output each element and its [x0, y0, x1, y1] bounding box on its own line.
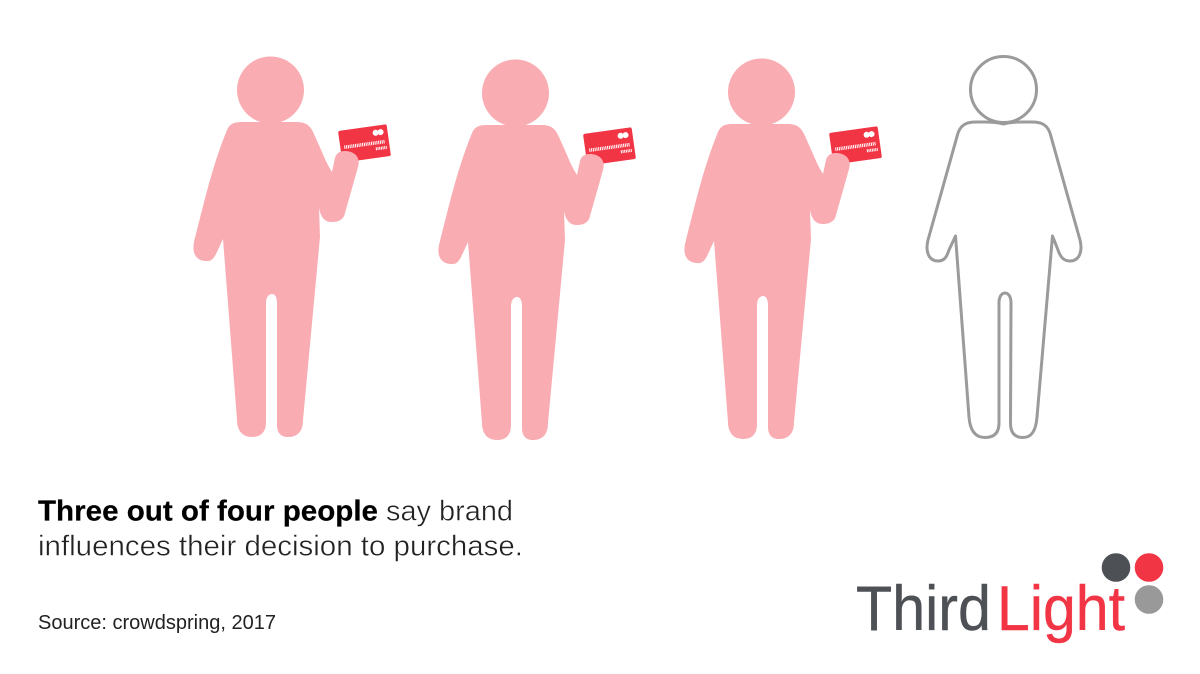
icon: person body — [193, 122, 359, 437]
person 2 holding card — [438, 60, 636, 440]
person 1 holding card — [193, 56, 391, 437]
logo dots — [1102, 553, 1163, 614]
icon: credit card — [338, 124, 391, 163]
icon: person body — [684, 124, 850, 439]
icon: outline head — [970, 56, 1036, 122]
icon: person head — [728, 58, 795, 126]
headline text: Three out of four people say brand — [38, 496, 513, 528]
logo wordmark: Third — [856, 574, 991, 644]
icon: outline body — [927, 122, 1081, 438]
logo: ThirdLight — [856, 553, 1163, 644]
icon: credit card — [583, 127, 636, 166]
source: Source: crowdspring, 2017 — [38, 612, 276, 634]
person 3 holding card — [684, 58, 882, 439]
icon: person body — [438, 125, 604, 440]
logo wordmark: Light — [997, 574, 1125, 644]
icon: person head — [237, 56, 304, 124]
person 4 outline — [927, 56, 1081, 438]
icon: credit card — [829, 126, 882, 165]
headline text second line: influences their decision to purchase. — [38, 530, 523, 562]
icon: person head — [482, 60, 549, 126]
